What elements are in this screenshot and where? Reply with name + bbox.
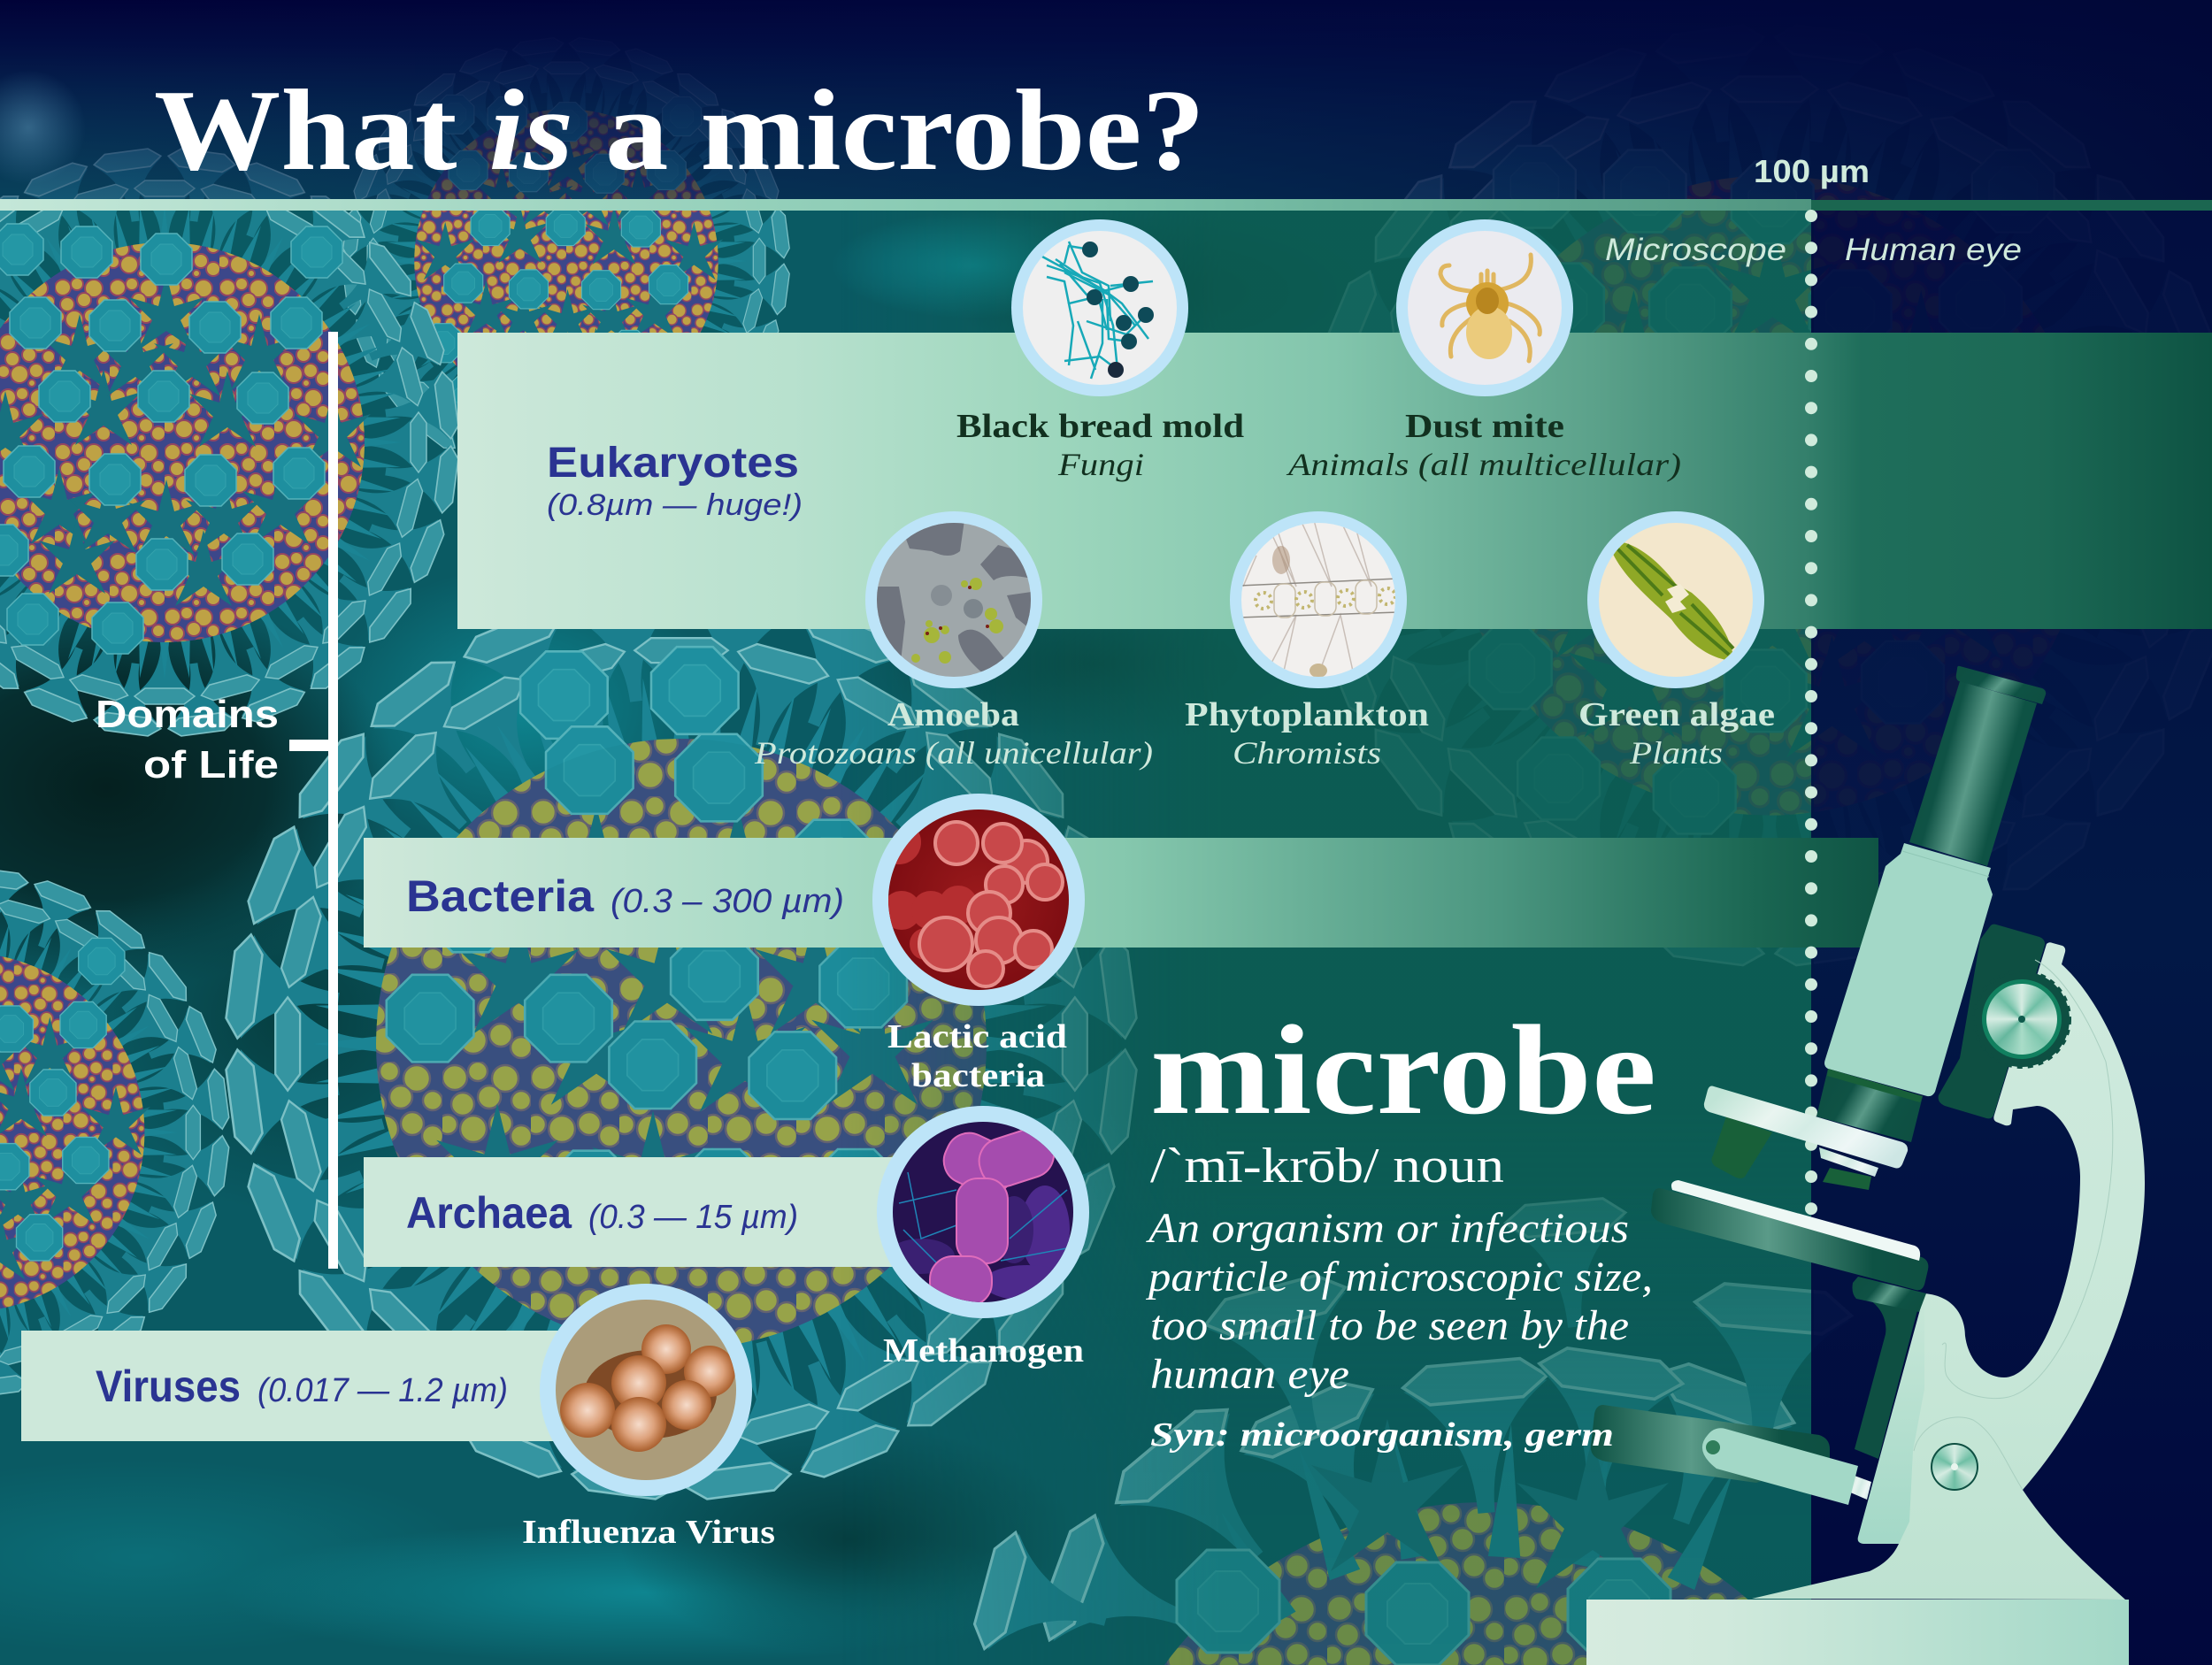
meaning: human eye: [1150, 1351, 1349, 1398]
virus: upper right faint: [1156, 0, 2212, 1109]
base plate: [1586, 1600, 2129, 1665]
text: Eukaryotes: [547, 440, 803, 522]
arm and foot: [1752, 942, 2145, 1600]
meaning: [1146, 1205, 1653, 1398]
photo: amoeba: [865, 511, 1042, 688]
arm details: [1914, 960, 2113, 1490]
condenser ring: [1591, 1405, 1830, 1483]
rear block: [1939, 925, 2045, 1118]
title: What is a microbe?: [154, 66, 1205, 195]
meaning: particle of microscopic size,: [1146, 1254, 1653, 1301]
virus: large left: [0, 59, 548, 825]
text: Archaea: [406, 1188, 798, 1238]
caption: black bread mold: [956, 408, 1244, 482]
caption: amoeba: [754, 696, 1153, 771]
text: Bacteria: Bacteria: [406, 871, 595, 921]
virus: lower right: [969, 1197, 1853, 1665]
caption: phytoplankton: [1185, 696, 1429, 771]
stage support: [1853, 1277, 1926, 1459]
right objective: [1819, 1147, 1878, 1190]
caption: influenza virus: Influenza Virus: [522, 1514, 775, 1551]
photo: methanogen: [877, 1106, 1089, 1318]
text: Viruses: (0.017 — 1.2 µm): [257, 1372, 508, 1409]
text: Eukaryotes: (0.8µm — huge!): [547, 488, 803, 522]
body tube: [1824, 843, 1993, 1096]
microscope: [1586, 666, 2145, 1665]
label: Human eye: Human eye: [1845, 233, 2022, 267]
caption: phytoplankton: Phytoplankton: [1185, 696, 1429, 733]
caption: lactic acid bacteria: bacteria: [911, 1057, 1045, 1094]
domains bracket: [289, 332, 338, 1269]
heading: Domains of Life: Domains: [96, 693, 279, 736]
caption: phytoplankton: Chromists: [1233, 735, 1381, 771]
label: Microscope: Microscope: [1605, 233, 1786, 267]
revolving disc: [1704, 1086, 1908, 1168]
nosepiece neck: [1816, 1069, 1923, 1142]
band: Viruses: [21, 1331, 588, 1441]
caption: dust mite: Dust mite: [1405, 408, 1564, 445]
headword: microbe: [1150, 1000, 1656, 1141]
text: Bacteria: (0.3 – 300 µm): [611, 883, 844, 920]
caption: dust mite: Animals (all multicellular): [1286, 447, 1681, 482]
photo: phytoplankton: [1230, 511, 1407, 688]
pivot screw: [1931, 1443, 1978, 1491]
text: Archaea: (0.3 — 15 µm): [588, 1199, 798, 1236]
meaning: too small to be seen by the: [1150, 1302, 1629, 1349]
virus: top centre: [275, 0, 857, 552]
caption: green algae: [1578, 696, 1775, 771]
eyepiece tube: [1909, 666, 2046, 866]
focus knob: [1974, 971, 2070, 1067]
caption: green algae: Green algae: [1578, 696, 1775, 733]
caption: methanogen: Methanogen: [883, 1332, 1084, 1370]
caption: dust mite: [1286, 408, 1681, 482]
text: Viruses: Viruses: [96, 1362, 241, 1411]
pillar: [1858, 1293, 1924, 1544]
band: Bacteria: [364, 838, 1878, 948]
dotted 100 µm line: [1805, 216, 1817, 1212]
synonyms: Syn: microorganism, germ: [1150, 1416, 1614, 1454]
caption: amoeba: Amoeba: [887, 696, 1019, 733]
left objective: [1711, 1116, 1772, 1178]
photo: black bread mold: [1011, 219, 1188, 396]
band: Eukaryotes: [457, 333, 2212, 629]
scale label: 100 µm: 100 µm: [1754, 153, 1870, 189]
caption: green algae: Plants: [1629, 735, 1723, 771]
meaning: An organism or infectious: [1146, 1205, 1629, 1252]
caption: black bread mold: Fungi: [1057, 447, 1144, 482]
caption: lactic acid bacteria: Lactic acid: [887, 1018, 1067, 1055]
photo: green algae: [1587, 511, 1764, 688]
photo: lactic acid bacteria: [872, 794, 1085, 1006]
band: Archaea: [364, 1157, 912, 1267]
photo: dust mite: [1396, 219, 1573, 396]
pronunciation: /`mī-krōb/ noun: [1150, 1139, 1504, 1193]
size scale rule: [0, 199, 2212, 211]
heading: Domains of Life: [96, 693, 279, 786]
lever: [1702, 1428, 1871, 1505]
text: Bacteria: [406, 871, 844, 921]
virus: lower left: [0, 787, 310, 1477]
caption: amoeba: Protozoans (all unicellular): [754, 735, 1153, 771]
text: Archaea: Archaea: [406, 1188, 572, 1238]
caption: lactic acid bacteria: [887, 1018, 1067, 1094]
definition: microbe: [1146, 1000, 1656, 1454]
caption: black bread mold: Black bread mold: [956, 408, 1244, 445]
text: Viruses: [96, 1362, 508, 1411]
virus: large centre: [88, 450, 1275, 1638]
photo: influenza virus: [540, 1284, 752, 1496]
stage: [1651, 1180, 1928, 1290]
heading: Domains of Life: of Life: [143, 743, 279, 786]
text: Eukaryotes: Eukaryotes: [547, 440, 799, 487]
